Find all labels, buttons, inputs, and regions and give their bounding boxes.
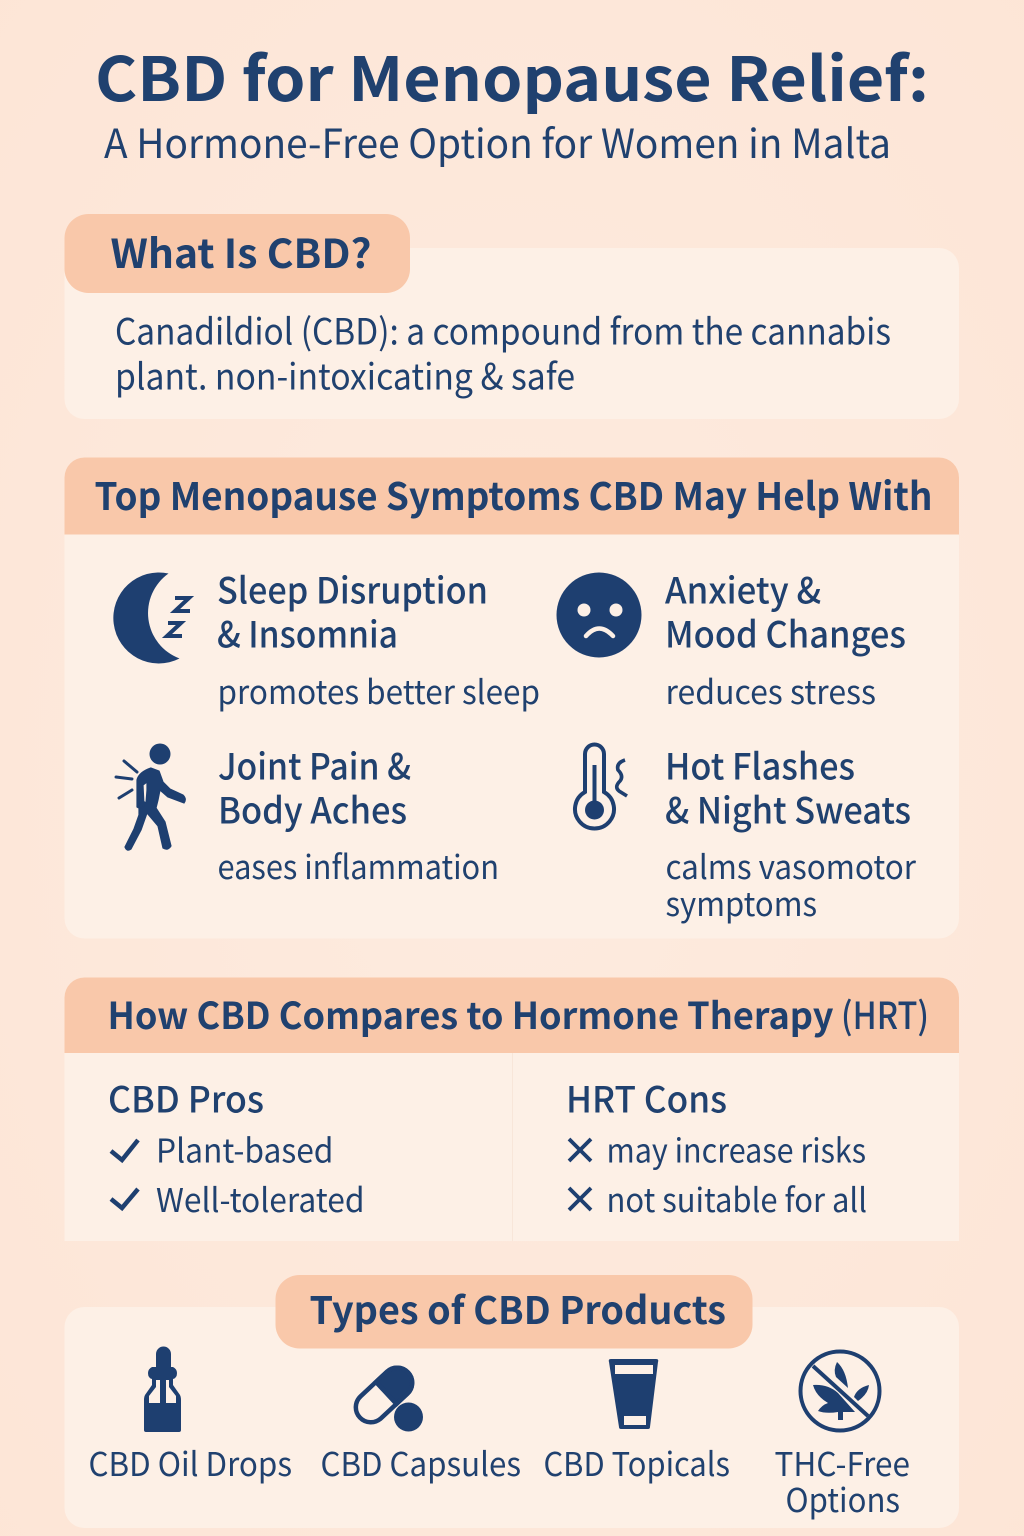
title: CBD for Menopause Relief: <box>95 30 929 119</box>
heading: comparison: (HRT) <box>841 986 929 1040</box>
label: oil drops: CBD Oil Drops <box>88 1438 292 1486</box>
panel: types of CBD products <box>64 1275 959 1528</box>
subtitle: A Hormone-Free Option for Women in Malta <box>104 112 891 170</box>
symptom: sleep <box>217 562 540 714</box>
symptom: anxiety <box>665 562 906 714</box>
icon: oil dropper bottle <box>144 1346 181 1432</box>
symptom: anxiety: Mood Changes <box>665 606 906 658</box>
title <box>95 30 929 170</box>
column: CBD pros: CBD Pros <box>108 1072 264 1124</box>
icon: sad face <box>556 572 642 658</box>
icon: cross <box>569 1139 591 1161</box>
symptom: hot flashes: & Night Sweats <box>665 782 911 834</box>
icon: thermometer <box>575 744 627 829</box>
text: CBD definition: plant. non-intoxicating & safe <box>115 348 575 400</box>
symptom: hot flashes: Hot Flashes <box>665 738 855 790</box>
symptom: sleep: Sleep Disruption <box>217 562 488 614</box>
heading pill: what is CBD <box>64 214 410 293</box>
symptom: hot flashes <box>665 738 916 926</box>
heading pill: what is CBD: What Is CBD? <box>110 222 372 280</box>
column: HRT cons: HRT Cons <box>566 1072 727 1124</box>
symptom: sleep: & Insomnia <box>217 606 398 658</box>
label: topicals: CBD Topicals <box>544 1438 730 1486</box>
heading pill: types of products: Types of CBD Products <box>310 1280 726 1335</box>
symptom: anxiety: Anxiety & <box>665 562 821 614</box>
heading: comparison <box>64 978 959 1053</box>
panel: CBD vs HRT comparison <box>64 978 959 1241</box>
symptom: anxiety: reduces stress <box>666 666 876 714</box>
symptom: hot flashes: calms vasomotor <box>666 841 916 889</box>
column: CBD pros <box>108 1072 364 1222</box>
column: CBD pros: Well-tolerated <box>156 1174 364 1222</box>
heading pill: types of products <box>276 1275 752 1348</box>
heading: top symptoms <box>64 458 959 534</box>
label: THC-free options <box>774 1438 910 1522</box>
column: HRT cons: not suitable for all <box>606 1174 867 1222</box>
label: THC-free options: THC-Free <box>774 1438 910 1486</box>
label: capsules: CBD Capsules <box>320 1438 521 1486</box>
heading: comparison: How CBD Compares to Hormone Therapy <box>108 986 834 1040</box>
symptom: sleep: promotes better sleep <box>218 666 540 714</box>
symptom: joint pain <box>218 738 499 889</box>
icon: cross <box>569 1188 591 1210</box>
column: HRT cons <box>566 1072 867 1222</box>
symptom: hot flashes: symptoms <box>666 878 817 926</box>
label: THC-free options: Options <box>786 1474 900 1522</box>
column: CBD pros: Plant-based <box>156 1124 334 1172</box>
icon: moon with Zs <box>113 572 190 663</box>
panel: top symptoms <box>64 458 959 938</box>
icon: capsule and pill <box>350 1362 423 1432</box>
icon: check mark <box>111 1140 138 1160</box>
heading: top symptoms: Top Menopause Symptoms CBD May Help With <box>94 466 932 521</box>
icon: check mark <box>111 1189 138 1208</box>
icon: topical tube <box>609 1359 658 1429</box>
icon: THC-free crossed leaf <box>800 1352 880 1430</box>
symptom: joint pain: Joint Pain & <box>218 738 411 790</box>
symptom: joint pain: Body Aches <box>218 782 407 834</box>
text: CBD definition: Canadildiol (CBD): a compound from the cannabis <box>115 304 891 356</box>
icon: person with joint pain <box>116 744 185 850</box>
column: HRT cons: may increase risks <box>606 1124 866 1172</box>
panel: what is CBD <box>64 214 959 419</box>
text: CBD definition <box>115 304 891 400</box>
symptom: joint pain: eases inflammation <box>218 841 499 889</box>
